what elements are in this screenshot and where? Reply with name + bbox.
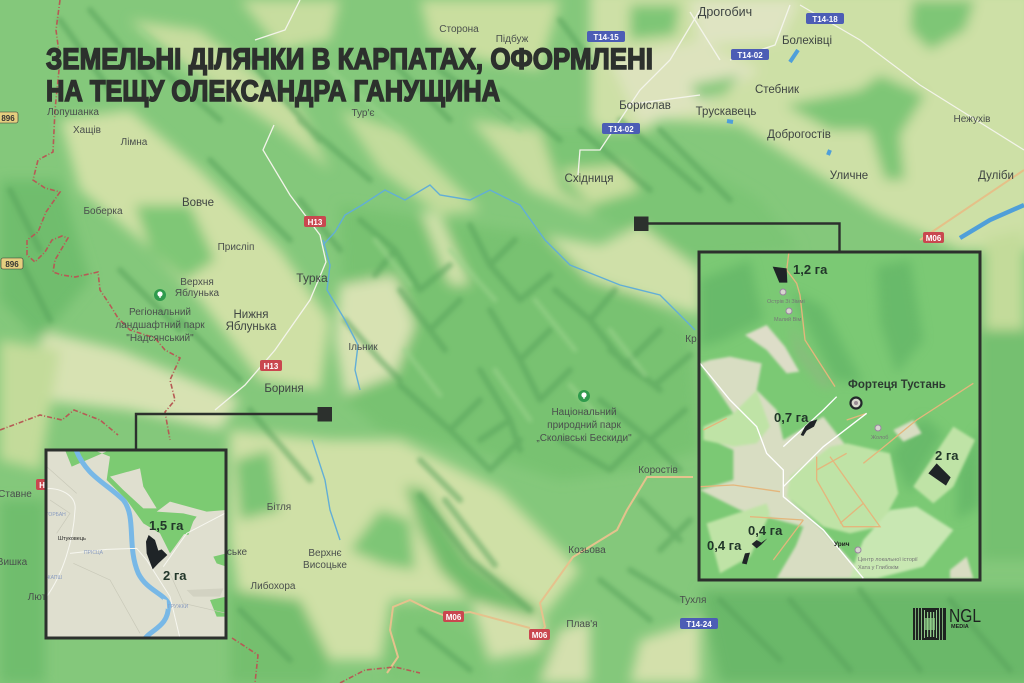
road badges: Т14-18: [812, 15, 838, 24]
settlement labels: Турка: [296, 271, 328, 285]
inset map: Tustan: [699, 243, 980, 580]
road badges: Н13: [264, 362, 279, 371]
inset 1 labels: Острів Зі Зіммі: [767, 299, 805, 305]
inset 1 labels: 1,2 га: [793, 262, 828, 277]
icon: regional park marker: [154, 289, 166, 301]
logo: NGL Media: [913, 606, 981, 640]
settlement labels: Лопушанка: [47, 107, 99, 118]
settlement labels: Дрогобич: [698, 5, 752, 19]
settlement labels: Болехівці: [782, 35, 832, 47]
settlement labels: Лімна: [121, 137, 148, 148]
settlement labels: Бітля: [267, 502, 291, 513]
settlement labels: Плав'я: [566, 619, 598, 630]
logo: NGL Media: NGL: [949, 606, 981, 626]
inset 2 labels: Штуковець: [58, 536, 86, 542]
road badges: Т14-02: [608, 125, 634, 134]
inset 2 labels: ЖАПШ: [46, 575, 62, 581]
road badges: М06: [532, 631, 548, 640]
road badges: М06: [446, 613, 462, 622]
settlement labels: „Сколівські Бескиди": [536, 433, 632, 444]
parcel: 0,4 ha upper: [752, 538, 767, 548]
river valley band: [545, 225, 700, 315]
parcel: 0,4 ha lower: [742, 553, 750, 564]
connector: Tustan inset: [634, 216, 840, 252]
settlement labels: Вовче: [182, 197, 214, 209]
country and region borders: [0, 0, 420, 683]
settlement labels: Стебник: [755, 84, 800, 96]
inset 2 labels: [46, 512, 189, 610]
inset 1 labels: Жолоб: [871, 435, 888, 441]
road badges: 896: [1, 114, 15, 123]
settlement labels: Уличне: [830, 170, 868, 182]
road badges: Т14-15: [593, 33, 619, 42]
inset 1 labels: 0,4 га: [748, 523, 783, 538]
settlement labels: Національний: [551, 407, 617, 418]
inset 1 labels: 0,7 га: [774, 410, 809, 425]
inset map: Boryn: [46, 450, 227, 639]
settlement labels: Яблунька: [226, 321, 277, 333]
parcel: 1,2 ha: [773, 267, 787, 283]
inset 2 labels: ГРУЖКИ: [168, 604, 189, 610]
logo: NGL Media: MEDIA: [951, 624, 969, 630]
inset 2 labels: ПРІСЦА: [84, 550, 104, 556]
inset 1 labels: Малий Вім: [774, 316, 801, 323]
inset 1 markers: [780, 289, 881, 553]
title: [46, 43, 653, 108]
settlement labels: Ільник: [348, 342, 378, 353]
settlement labels: Тухля: [680, 595, 706, 606]
settlement labels: Підбуж: [496, 33, 529, 45]
settlement labels: Либохора: [251, 580, 296, 592]
settlement labels: Прислiп: [218, 242, 254, 253]
inset 1 labels: Хата у Глибокім: [858, 565, 899, 571]
settlement labels: "Надсянський": [126, 333, 194, 344]
inset 1 labels: 0,4 га: [707, 538, 742, 553]
settlement labels: Висоцьке: [303, 560, 347, 571]
settlement labels: ське: [227, 547, 248, 558]
roads: [215, 0, 1024, 673]
settlement labels: Трускавець: [696, 106, 756, 118]
forest ridge in south valley: [405, 485, 540, 625]
settlement labels: Дуліби: [978, 170, 1014, 182]
settlement labels: Верхнє: [308, 548, 342, 559]
inset 1 labels: [707, 262, 959, 571]
parcel: 2 ha: [928, 463, 951, 486]
road badges: М06: [926, 234, 942, 243]
settlement labels: Тур'є: [351, 108, 375, 119]
settlement labels: Бориня: [264, 383, 304, 395]
icon: national park marker: [578, 390, 590, 402]
road badges: Н13: [308, 218, 323, 227]
settlement labels: ландшафтний парк: [115, 319, 205, 331]
settlement labels: Боберка: [83, 205, 123, 217]
settlement labels: Борислав: [619, 100, 671, 112]
inset 1 parcels: [742, 267, 951, 564]
inset 2 labels: ГОРБАН: [46, 512, 66, 518]
settlement labels: Нижня: [234, 309, 268, 321]
title: ЗЕМЕЛЬНІ ДІЛЯНКИ В КАРПАТАХ, ОФОРМЛЕНІ: [46, 43, 653, 76]
inset 2 parcel: [146, 535, 167, 569]
road badges: Н: [39, 481, 45, 490]
settlement labels: Коростів: [638, 465, 678, 476]
road badges: 896: [5, 260, 19, 269]
settlement labels: Регіональний: [129, 307, 191, 318]
inset 2 labels: 2 га: [163, 568, 187, 583]
inset 1 labels: Центр локальної історії: [858, 557, 918, 563]
settlement labels: Сторона: [439, 24, 479, 35]
inset 2 labels: 1,5 га: [149, 518, 184, 533]
settlement labels: Кр: [685, 334, 697, 345]
settlement labels: природний парк: [547, 420, 621, 431]
rivers: [312, 50, 1024, 540]
settlement labels: Козьова: [568, 545, 606, 556]
inset 1 labels: Фортеця Тустань: [848, 379, 946, 391]
inset 1 labels: 2 га: [935, 448, 959, 463]
settlement labels: Хащів: [73, 125, 101, 136]
road badges: Т14-24: [686, 620, 712, 629]
settlement labels: Лют: [28, 592, 47, 603]
road badges: Т14-02: [737, 51, 763, 60]
title: НА ТЕЩУ ОЛЕКСАНДРА ГАНУЩИНА: [46, 75, 500, 108]
parcel: 0,7 ha: [801, 419, 817, 436]
settlement labels: Верхня: [180, 277, 214, 288]
connector: Boryn inset: [136, 407, 332, 449]
inset 1 labels: Урич: [834, 541, 850, 548]
settlement labels: Доброгостів: [767, 129, 831, 141]
settlement labels: Східниця: [565, 173, 613, 185]
settlement labels: Нежухів: [953, 114, 991, 125]
settlement labels: Яблунька: [175, 287, 220, 299]
